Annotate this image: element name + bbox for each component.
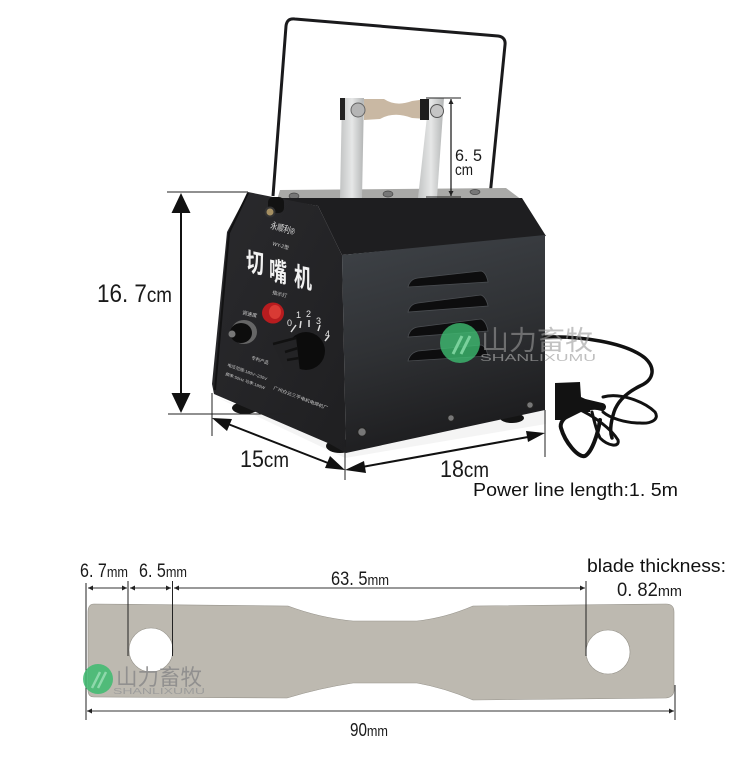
side screws <box>358 402 534 436</box>
dial numbers: 4 <box>325 329 330 339</box>
handle wire <box>273 19 505 196</box>
dimension: machine height 16.7cm: 16. 7cm <box>97 280 172 308</box>
blade dimension: 63.5mm: 63. 5mm <box>331 569 389 590</box>
watermark: lower: SHANLIXUMU <box>113 687 205 696</box>
dial numbers: 0 <box>287 318 292 328</box>
power cord and plug <box>545 337 656 456</box>
panel title: 切嘴机: 机 <box>294 261 312 295</box>
large dial knob <box>273 332 325 372</box>
machine feet <box>232 402 524 453</box>
blade dimension: 6.7mm <box>80 561 128 720</box>
dimension: machine width 18cm: 18cm <box>440 456 489 483</box>
dimension: machine depth 15cm: 15cm <box>240 446 289 473</box>
panel text: brand: 永顺利® <box>269 219 297 237</box>
blade dimension: 6.7mm: 6. 7mm <box>80 561 128 582</box>
front panel <box>212 192 346 453</box>
dimension: machine depth 15cm <box>212 393 345 480</box>
top plate <box>277 188 522 200</box>
small knob <box>228 320 257 344</box>
panel title: 切嘴机: 嘴 <box>269 255 287 289</box>
handle pivot <box>266 197 284 216</box>
panel text: specifications: 专利产品 <box>250 354 270 367</box>
watermark: lower <box>83 664 205 696</box>
blade dimension: 6.5mm <box>130 561 187 656</box>
panel text: specifications: 电压范围:180V~230V <box>227 361 269 381</box>
dimension: machine width 18cm <box>345 410 545 483</box>
blade thickness callout: blade thickness: <box>587 556 726 576</box>
plug <box>555 382 592 420</box>
dial numbers: 1 <box>296 310 301 320</box>
blade mounting posts <box>340 98 444 198</box>
blade thickness callout <box>587 556 726 601</box>
rear top bevel <box>272 198 546 255</box>
panel label: indicator: 指示灯 <box>272 289 288 300</box>
dial scale <box>291 320 329 341</box>
panel title: 切嘴机 <box>246 246 312 295</box>
dimension: post height 6.5cm: cm <box>455 162 473 179</box>
dimension: machine height 16.7cm <box>97 192 290 414</box>
top screws <box>289 190 480 199</box>
front panel left ridge <box>215 193 248 390</box>
panel text: specifications: 频率:50Hz 功率:180W <box>225 370 266 390</box>
dimension: post height 6.5cm: 6. 5 <box>455 146 482 165</box>
watermark: upper <box>440 323 596 364</box>
floor reflection under machine <box>214 396 546 458</box>
blade photo <box>88 604 674 700</box>
panel label: speed: 调速度 <box>242 309 258 320</box>
panel text: specifications: 广州白云三平电机电焊机厂 <box>272 384 329 412</box>
watermark: lower: 山力畜牧 <box>116 665 202 690</box>
dial numbers <box>287 309 330 339</box>
blade dimension: 90mm: 90mm <box>350 720 388 740</box>
panel title: 切嘴机: 切 <box>246 246 264 280</box>
machine photo <box>212 19 546 453</box>
blade dimension: 6.5mm: 6. 5mm <box>139 561 187 582</box>
watermark: upper: 山力畜牧 <box>481 326 593 356</box>
panel text: model: WY-2型 <box>271 240 290 252</box>
watermark: upper: SHANLIXUMU <box>480 353 596 364</box>
panel text: specifications <box>225 354 329 412</box>
vents <box>408 271 488 361</box>
side panel <box>342 235 545 453</box>
dimension: post height 6.5cm <box>426 98 482 197</box>
dial numbers: 3 <box>316 316 321 326</box>
power line length label: Power line length:1. 5m <box>473 480 678 500</box>
dial numbers: 2 <box>306 309 311 319</box>
blade thickness callout: 0. 82mm <box>617 580 682 601</box>
red indicator lamp <box>262 302 284 324</box>
